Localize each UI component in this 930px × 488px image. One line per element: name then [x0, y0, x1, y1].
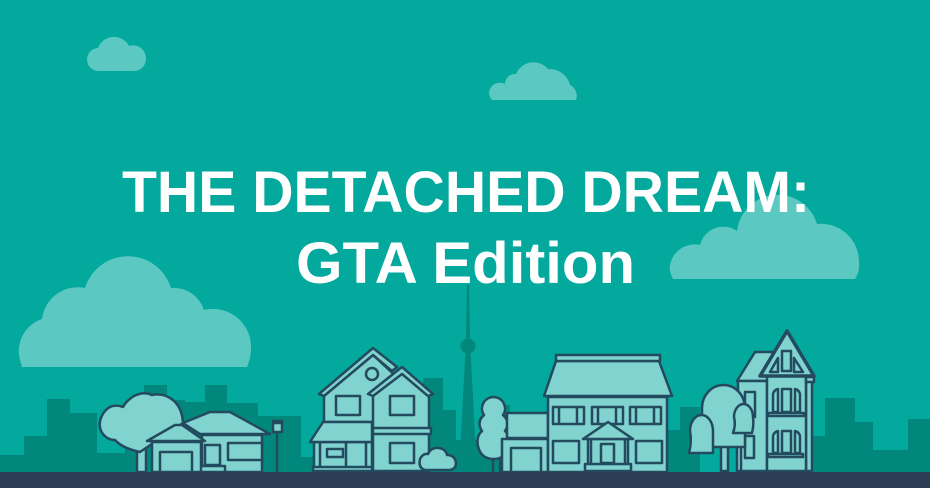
side windows: [745, 392, 755, 458]
round window: [366, 368, 378, 380]
garage: [152, 442, 201, 472]
cap: [806, 377, 814, 382]
portico: [583, 422, 633, 471]
cloud: right: [670, 195, 859, 279]
porch: [310, 422, 372, 471]
bush: [420, 448, 456, 470]
trees: [689, 385, 753, 471]
gable: [147, 425, 205, 441]
cloud: top left: [87, 37, 146, 71]
left gable wall: [324, 355, 400, 422]
ground: [0, 472, 930, 488]
body: [202, 435, 262, 472]
CN Tower: [459, 285, 477, 472]
body: [548, 397, 667, 472]
roof cap: [556, 355, 660, 361]
lower windows: [553, 441, 662, 463]
left window: [336, 396, 360, 415]
step: [200, 466, 225, 472]
title: GTA Edition: [296, 231, 635, 296]
side garage: [502, 413, 548, 472]
left roof: [737, 352, 775, 381]
gable windows: [770, 351, 803, 372]
tower body: [767, 376, 806, 471]
round tree: [478, 397, 510, 472]
garage door: [160, 452, 192, 472]
right upper window: [390, 396, 414, 415]
upper windows: [553, 407, 661, 424]
right gable roof: [368, 367, 433, 396]
house: grand with portico: [502, 355, 672, 472]
gable: [760, 331, 814, 376]
house: two gables: [310, 348, 456, 471]
window: [228, 443, 262, 460]
arched windows: [768, 389, 804, 457]
house: bungalow with tree and lamp: [100, 393, 283, 472]
door: [205, 445, 220, 465]
skyline: [0, 285, 930, 472]
roof: [544, 361, 672, 396]
title: [122, 160, 810, 296]
band: [373, 428, 431, 434]
street lamp: [272, 421, 283, 472]
cloud: large left: [19, 256, 251, 367]
left gable roof: [319, 348, 397, 396]
left wing: [738, 381, 767, 471]
side strip: [806, 378, 812, 471]
title: THE DETACHED DREAM:: [122, 160, 810, 225]
house: victorian tower: [689, 331, 814, 471]
roof: [183, 412, 270, 434]
cloud: top centre: [489, 62, 577, 100]
tree: [100, 393, 183, 472]
right lower window: [390, 443, 414, 463]
right wing: [373, 373, 429, 471]
